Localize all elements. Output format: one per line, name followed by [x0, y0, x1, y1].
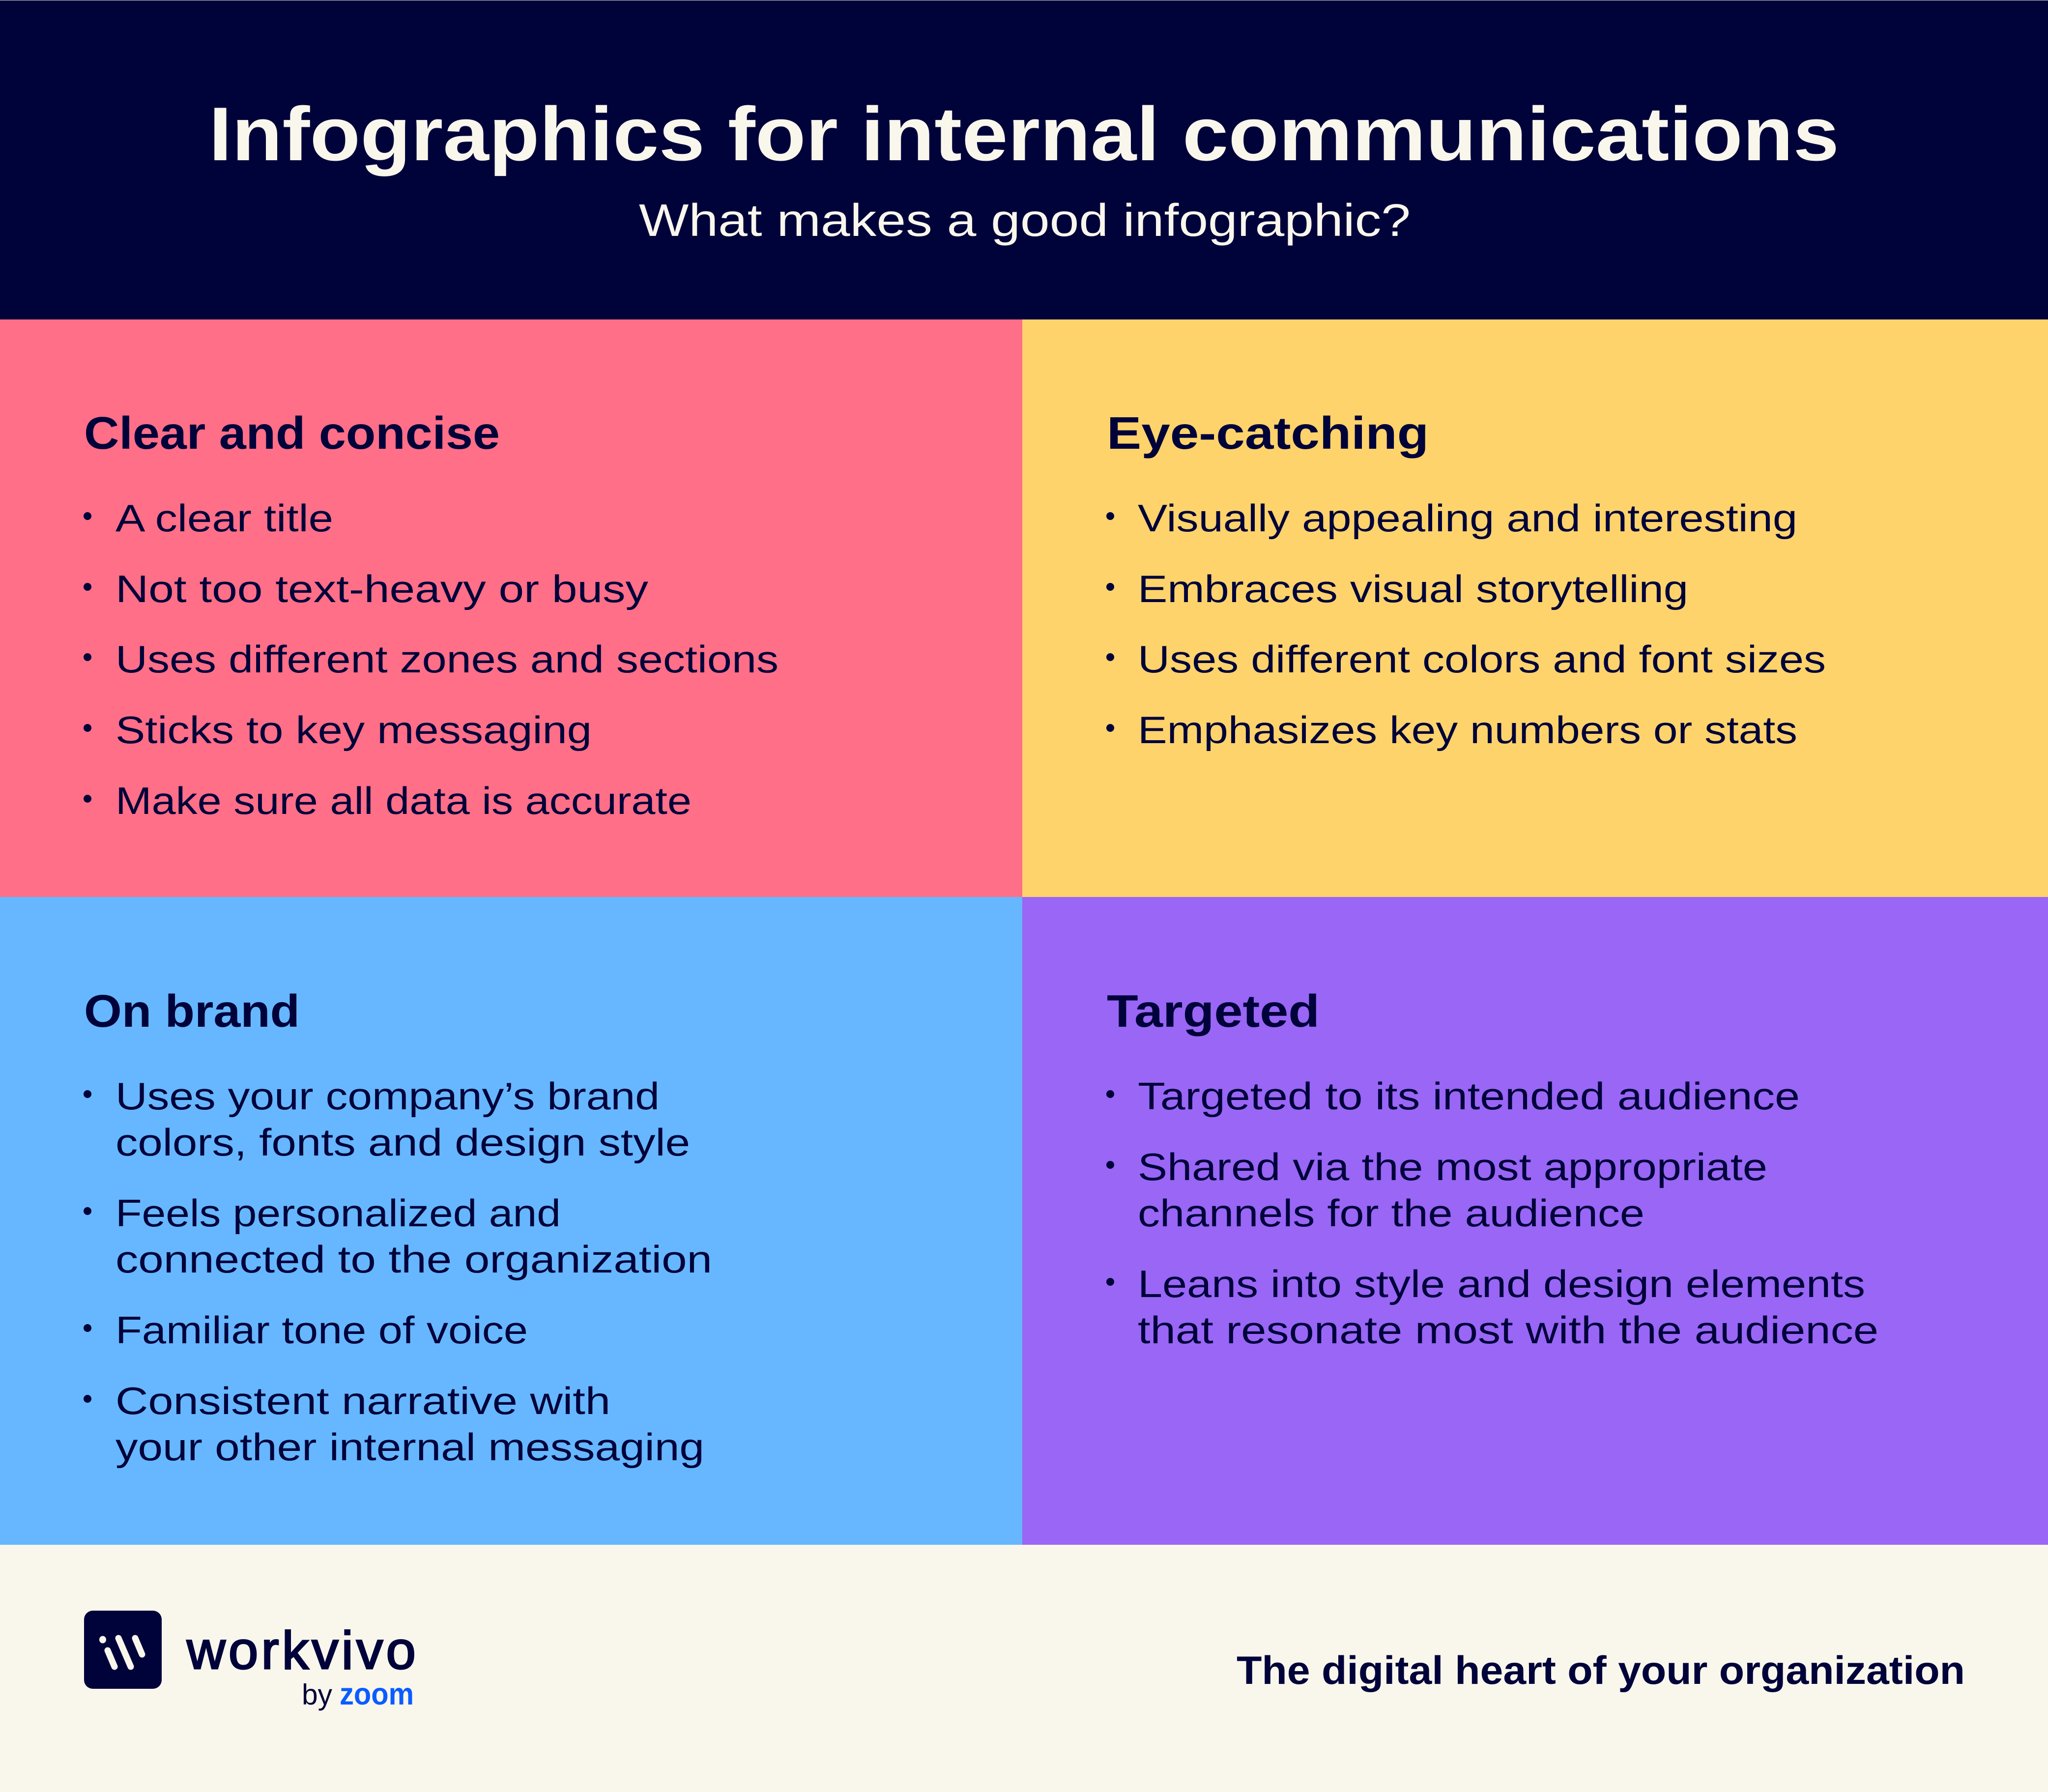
- heading: on brand: On brand: [84, 985, 300, 1037]
- logo sub-line: by zoom: by: [302, 1678, 332, 1711]
- list: clear and concise: A clear title: [115, 496, 333, 540]
- list: eye-catching: Embraces visual storytelling: [1138, 567, 1688, 610]
- list: targeted: Shared via the most appropriate: [1138, 1145, 1767, 1188]
- list: clear and concise: Make sure all data is accurate: [115, 779, 692, 822]
- list: on brand: [84, 1074, 712, 1469]
- list: on brand: colors, fonts and design style: [115, 1121, 690, 1164]
- list: on brand: Feels personalized and: [115, 1191, 561, 1235]
- list: targeted: Targeted to its intended audience: [1138, 1074, 1800, 1118]
- subtitle: What makes a good infographic?: [639, 195, 1411, 246]
- heading: targeted: Targeted: [1107, 985, 1320, 1037]
- list: targeted: [1106, 1074, 1878, 1352]
- panel: clear and concise: [0, 319, 1022, 897]
- list: targeted: channels for the audience: [1138, 1191, 1644, 1235]
- list: clear and concise: Sticks to key messaging: [115, 708, 592, 751]
- list: targeted: Leans into style and design elements: [1138, 1262, 1865, 1305]
- logo sub-line: by zoom: [302, 1677, 414, 1711]
- list: on brand: Consistent narrative with: [115, 1379, 610, 1422]
- panel: header: [0, 0, 2048, 319]
- list: clear and concise: Not too text-heavy or busy: [115, 567, 648, 610]
- heading: clear and concise: Clear and concise: [84, 407, 500, 459]
- panel: eye-catching: [1022, 319, 2048, 897]
- panel: on brand: [0, 897, 1022, 1545]
- list: on brand: Uses your company’s brand: [115, 1074, 660, 1118]
- list: targeted: that resonate most with the audience: [1138, 1308, 1878, 1352]
- list: clear and concise: [84, 496, 779, 822]
- list: on brand: Familiar tone of voice: [115, 1308, 528, 1352]
- icon: workvivo logo mark: [84, 1611, 162, 1689]
- title: Infographics for internal communications: [209, 91, 1839, 176]
- list: eye-catching: Uses different colors and font sizes: [1138, 637, 1826, 681]
- heading: eye-catching: Eye-catching: [1107, 407, 1429, 459]
- list: on brand: your other internal messaging: [115, 1425, 704, 1469]
- list: eye-catching: Visually appealing and interesting: [1138, 496, 1797, 540]
- tagline: The digital heart of your organization: [1237, 1648, 1965, 1693]
- list: clear and concise: Uses different zones and sections: [115, 637, 779, 681]
- list: eye-catching: [1106, 496, 1826, 751]
- panel: targeted: [1022, 897, 2048, 1545]
- logo wordmark: workvivo: workvivo: [186, 1620, 416, 1680]
- logo sub-line: by zoom: zoom: [340, 1677, 414, 1711]
- list: eye-catching: Emphasizes key numbers or stats: [1138, 708, 1797, 751]
- list: on brand: connected to the organization: [115, 1238, 712, 1281]
- panel: footer: [0, 1545, 2048, 1792]
